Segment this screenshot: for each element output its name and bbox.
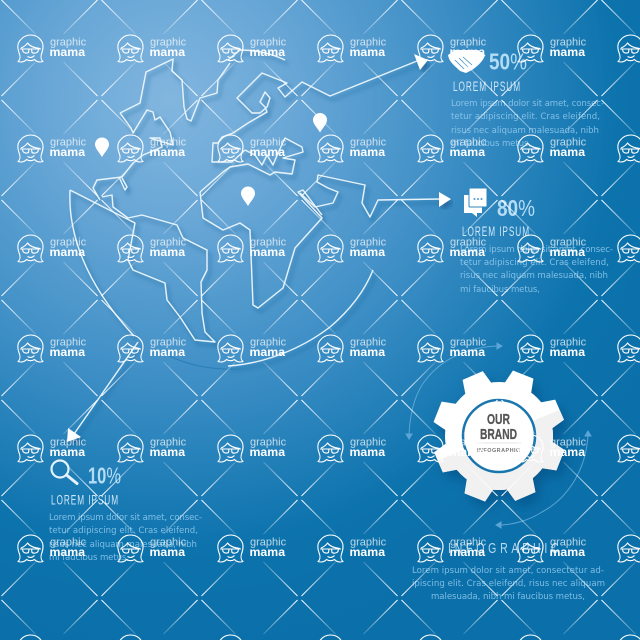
globe arc bottom right (228, 270, 373, 366)
watermark logos: graphic (250, 536, 287, 548)
body text: risus nec aliquam malesuada, nibh (49, 540, 197, 550)
watermark logos: graphic (450, 336, 487, 348)
watermark logos: graphic (50, 336, 87, 348)
watermark logos: mama (350, 45, 385, 59)
brand ring (463, 400, 535, 472)
brand name (480, 411, 517, 443)
arrow: bottom left (67, 342, 138, 442)
icon: handshake heart (448, 50, 485, 73)
central and south america east (70, 190, 215, 342)
panel: 10 percent (49, 460, 202, 563)
watermark logos: graphic (550, 336, 587, 348)
watermark logos: mama (350, 245, 385, 259)
watermark logos: mama (250, 345, 285, 359)
gear (432, 369, 566, 503)
heading: LOREM IPSUM (51, 492, 119, 508)
watermark logos: graphic (350, 536, 387, 548)
watermark logos: mama (450, 345, 485, 359)
watermark logos: graphic (450, 236, 487, 248)
watermark logos: graphic (50, 236, 87, 248)
watermark logos: graphic (250, 136, 287, 148)
watermark logos: mama (350, 145, 385, 159)
watermark logos: graphic (150, 136, 187, 148)
watermark logos: mama (550, 445, 585, 459)
brand tagline: INFOGRAPHIC (477, 448, 520, 454)
body text: tetur adipiscing elit. Cras eleifend, (451, 112, 600, 122)
watermark logos: mama (250, 45, 285, 59)
body text: tetur adipiscing elit. Cras eleifend, (460, 258, 609, 268)
arrow: curved upper left (406, 343, 502, 439)
watermark logos: graphic (450, 136, 487, 148)
watermark logos: graphic (50, 136, 87, 148)
watermark logos: graphic (350, 36, 387, 48)
icon: chat bubbles (464, 188, 487, 217)
watermark logos: mama (250, 445, 285, 459)
body text (49, 513, 202, 563)
watermark logos: graphic (250, 36, 287, 48)
arrow head: top right (414, 54, 428, 70)
watermark logos: graphic (550, 436, 587, 448)
watermark logos: mama (150, 445, 185, 459)
watermark logos: mama (550, 45, 585, 59)
body text: Lorem ipsum dolor sit amet, consectetur ad- (412, 566, 604, 576)
watermark logos: mama (450, 45, 485, 59)
value: 10% (88, 462, 121, 488)
body text: Lorem ipsum dolor sit amet, consec- (451, 99, 604, 109)
africa (200, 190, 322, 308)
arrow: curved lower right (496, 431, 591, 528)
heading: LOREM IPSUM (462, 224, 530, 239)
watermark logos: graphic (350, 436, 387, 448)
arabia (300, 175, 440, 217)
watermark logos: graphic (450, 36, 487, 48)
scandinavia and russia to arrow (233, 61, 417, 133)
watermark logos: graphic (250, 436, 287, 448)
body text (451, 99, 604, 149)
watermark logos: mama (350, 545, 385, 559)
faint globe shadow arc (167, 355, 240, 369)
icon: magnifier (52, 460, 77, 484)
watermark logos: mama (250, 545, 285, 559)
map pin: right (313, 113, 327, 132)
arrow head: middle right (439, 192, 451, 207)
body text (412, 566, 605, 602)
north america east (93, 110, 173, 200)
value: 50% (489, 48, 527, 74)
watermark logos: graphic (150, 436, 187, 448)
watermark logos: graphic (550, 236, 587, 248)
watermark logos: graphic (450, 536, 487, 548)
watermark logos: mama (450, 245, 485, 259)
watermark logos: graphic (150, 336, 187, 348)
watermark logos: mama (250, 245, 285, 259)
body text: Lorem ipsum dolor sit amet, consec- (49, 513, 202, 523)
body text: mi faucibus metus, (460, 285, 540, 295)
watermark logos: mama (150, 145, 185, 159)
watermark logos: mama (350, 345, 385, 359)
gear badge (432, 369, 566, 503)
watermark logos: mama (550, 145, 585, 159)
world map (70, 50, 440, 366)
body text: tetur adipiscing elit. Cras eleifend, (49, 526, 198, 536)
watermark logos: graphic (350, 136, 387, 148)
watermark logos: graphic (550, 36, 587, 48)
panel: 50 percent (448, 48, 604, 149)
watermark logos: mama (50, 345, 85, 359)
value: 80% (497, 195, 535, 221)
watermark logos: mama (450, 445, 485, 459)
brand name: BRAND (480, 426, 517, 443)
watermark logos: mama (50, 45, 85, 59)
body text: risus nec aliquam malesuada, nibh (460, 271, 608, 281)
gulf (119, 177, 127, 190)
watermark logos: mama (250, 145, 285, 159)
watermark logos: mama (350, 445, 385, 459)
panel: 80 percent (460, 188, 613, 295)
watermark logos: mama (150, 345, 185, 359)
watermark logos: graphic (50, 36, 87, 48)
body text: ipiscing elit. Cras eleifend, risus nec aliquam (412, 579, 605, 589)
heading: INFOGRAPHIC (448, 539, 559, 556)
body text: mi faucibus metus, (451, 139, 531, 149)
globe arc top (228, 50, 285, 60)
watermark logos: mama (150, 545, 185, 559)
brand name: OUR (487, 411, 510, 428)
north america north (120, 59, 230, 121)
heading: LOREM IPSUM (453, 79, 521, 94)
watermark logos: mama (450, 145, 485, 159)
watermark logos: mama (550, 245, 585, 259)
iberia and british isles (212, 133, 245, 162)
brand divider (477, 442, 521, 444)
body text: malesuada, nibh mi faucibus metus, (431, 592, 585, 602)
watermark logos: mama (550, 345, 585, 359)
body text (460, 245, 613, 295)
body text: Lorem ipsum dolor sit amet, consec- (460, 245, 613, 255)
watermark logos: graphic (150, 36, 187, 48)
body text: mi faucibus metus, (49, 553, 129, 563)
watermark logos: mama (550, 545, 585, 559)
watermark logos: mama (50, 445, 85, 459)
watermark logos: graphic (250, 336, 287, 348)
watermark logos: graphic (550, 136, 587, 148)
watermark logos: graphic (150, 536, 187, 548)
watermark logos: mama (150, 45, 185, 59)
watermark logos: mama (150, 245, 185, 259)
map pin: left (95, 138, 109, 157)
europe south coast (200, 138, 303, 192)
watermark logos: mama (50, 245, 85, 259)
panel: infographic description (412, 539, 605, 602)
watermark logos: graphic (350, 236, 387, 248)
watermark logos: mama (50, 545, 85, 559)
watermark logos: graphic (50, 436, 87, 448)
globe arc left (70, 190, 134, 336)
watermark logos: graphic (250, 236, 287, 248)
body text: risus nec aliquam malesuada, nibh (451, 126, 599, 136)
watermark logos: graphic (350, 336, 387, 348)
watermark logos: graphic (450, 436, 487, 448)
watermark logos: mama (50, 145, 85, 159)
watermark logos: graphic (550, 536, 587, 548)
watermark logos: graphic (150, 236, 187, 248)
watermark logos: graphic (50, 536, 87, 548)
watermark logos: mama (450, 545, 485, 559)
map pin: centre (241, 186, 255, 206)
